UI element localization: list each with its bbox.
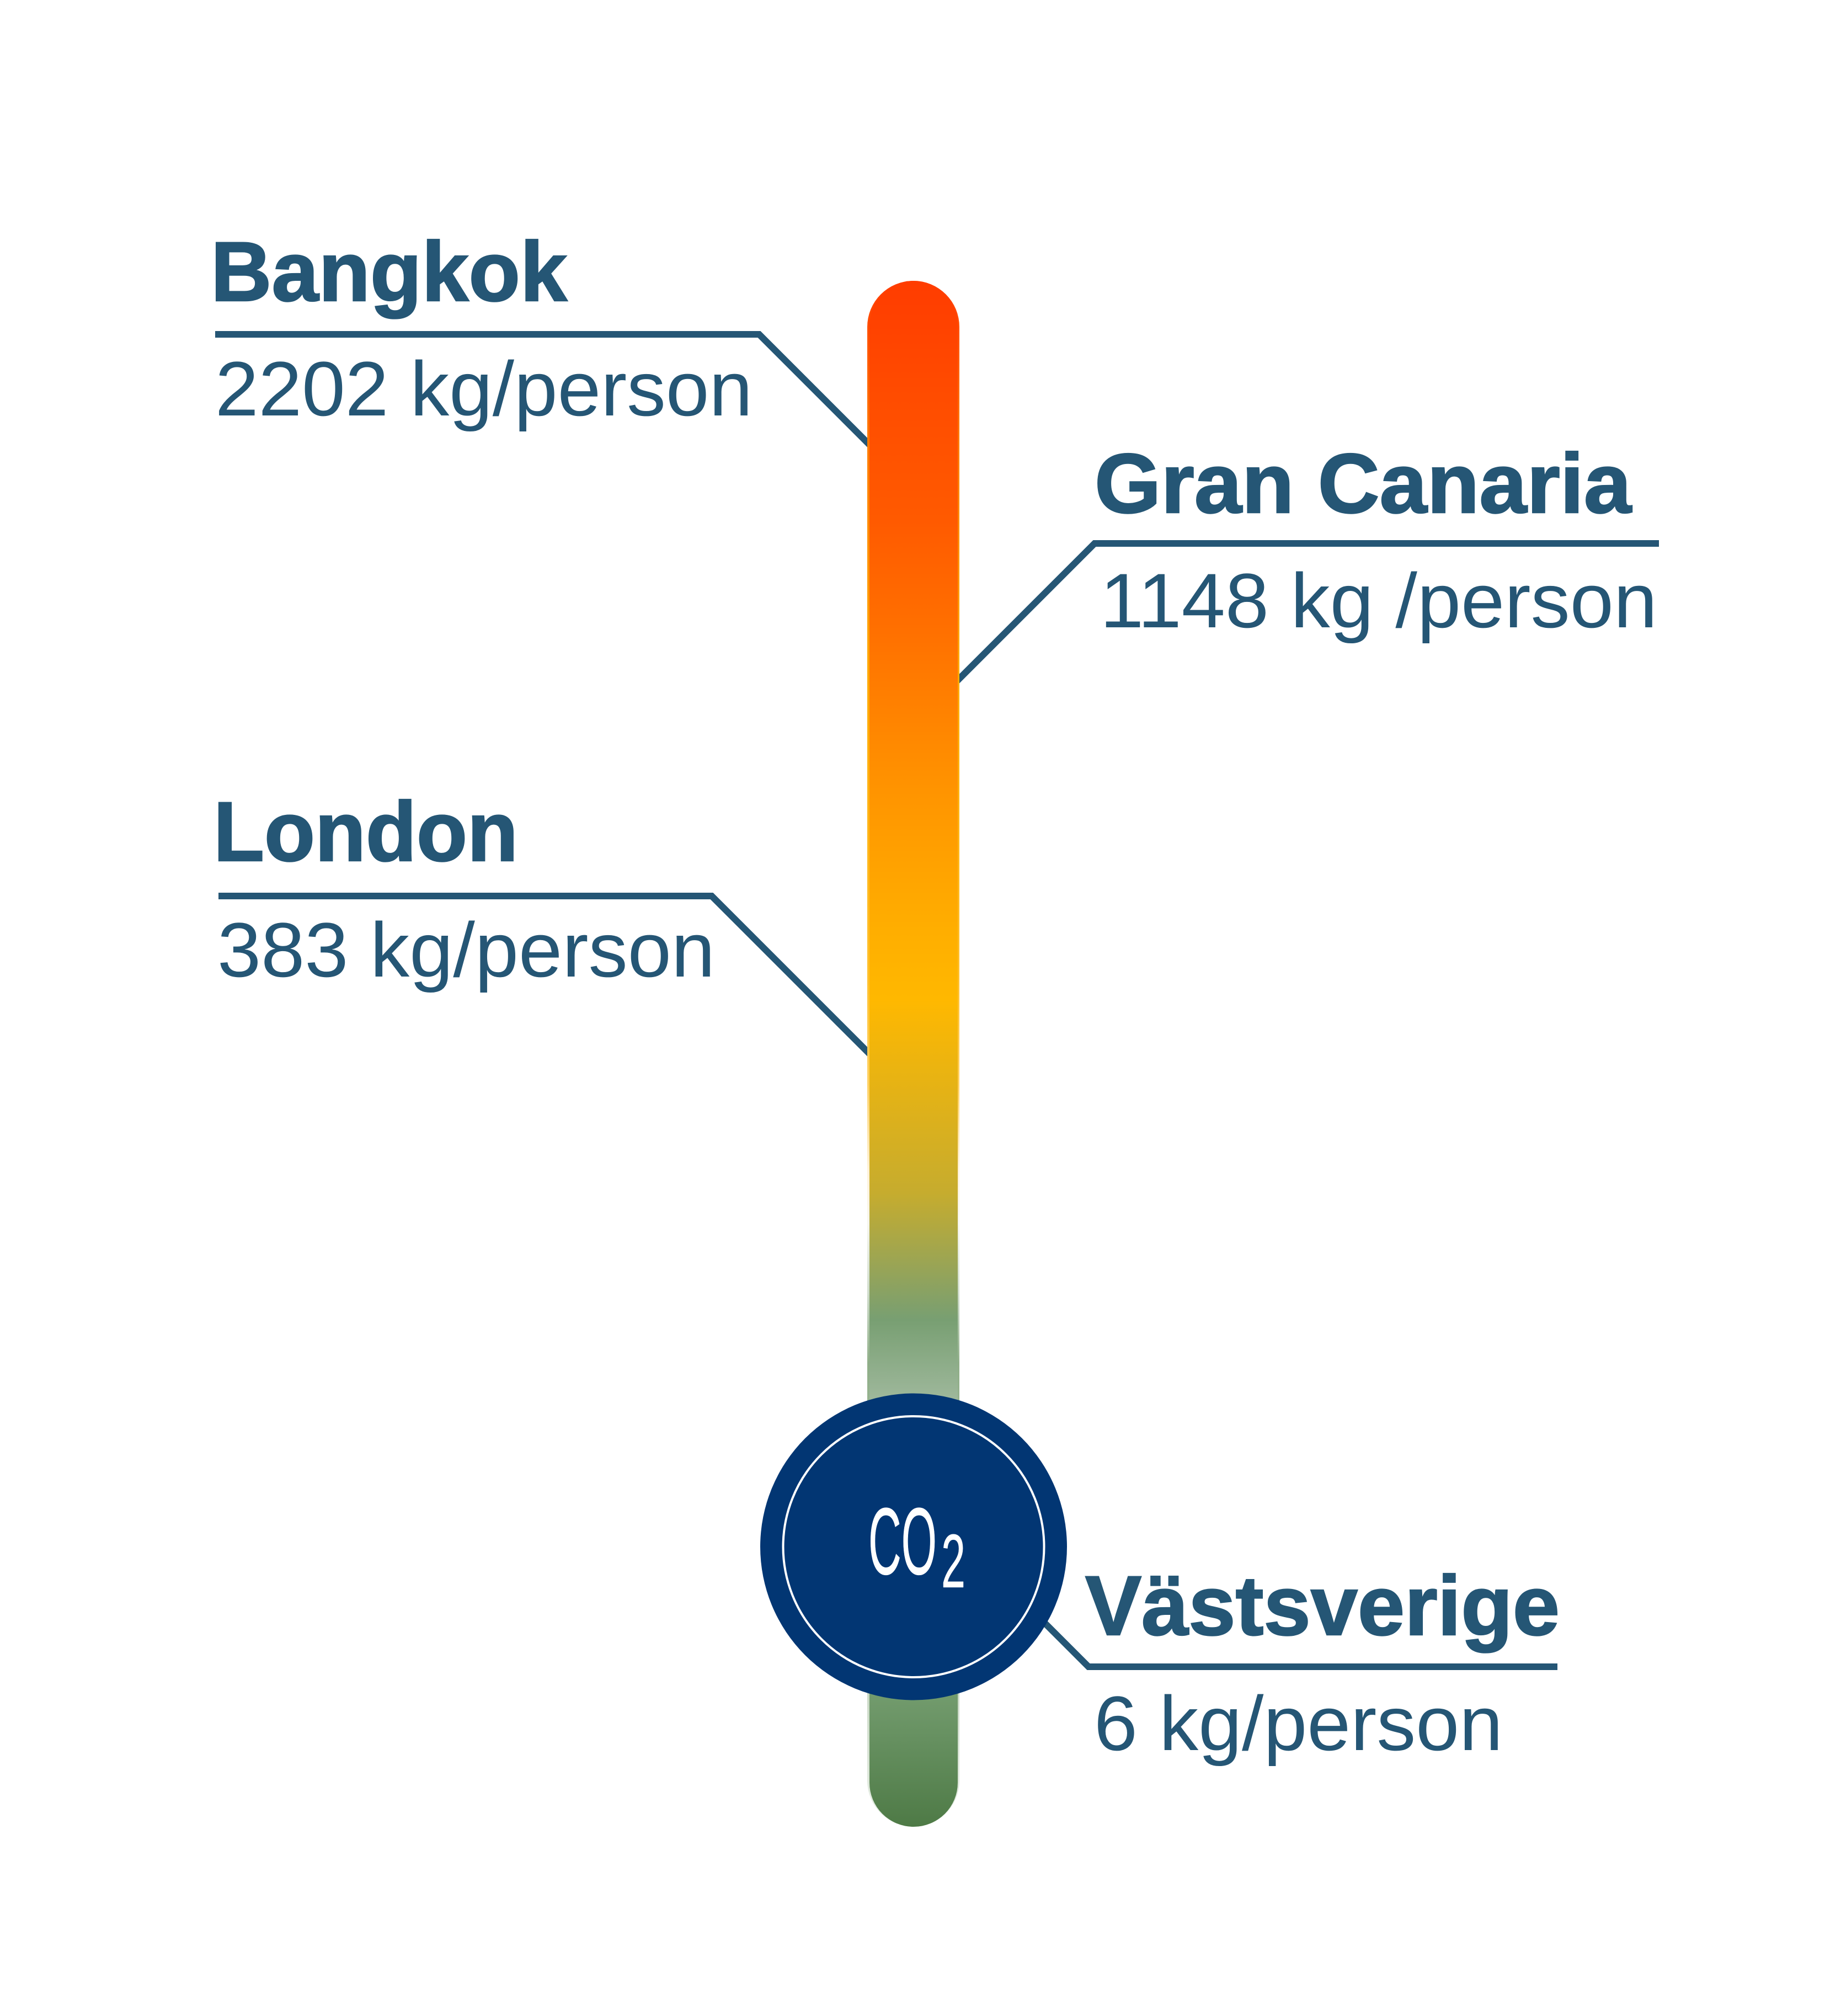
value: Bangkok: 2202 kg/person: [215, 345, 753, 432]
value: London: 383 kg/person: [217, 906, 715, 993]
value: Västsverige: 6 kg/person: [1094, 1680, 1503, 1767]
label: London: [214, 785, 715, 993]
CO2 badge: [760, 1394, 1067, 1700]
leader line: London: [218, 896, 874, 1058]
leader line: Bangkok: [215, 334, 874, 449]
label: Västsverige: [1085, 1559, 1560, 1767]
label: Gran Canaria: [1095, 436, 1657, 644]
heading: Västsverige: Västsverige: [1085, 1559, 1560, 1653]
CO2 label: [868, 1489, 965, 1604]
thermometer bar: [867, 281, 959, 1827]
leader line: Gran Canaria: [956, 543, 1659, 682]
leader line: Västsverige: [1037, 1615, 1557, 1667]
label: Bangkok: [211, 225, 753, 432]
heading: London: London: [214, 785, 518, 879]
CO2 label: CO: [868, 1489, 937, 1594]
heading: Bangkok: Bangkok: [211, 225, 568, 319]
heading: Gran Canaria: Gran Canaria: [1095, 436, 1632, 531]
value: Gran Canaria: 1148 kg /person: [1100, 557, 1657, 644]
CO2 label: 2: [941, 1519, 965, 1604]
